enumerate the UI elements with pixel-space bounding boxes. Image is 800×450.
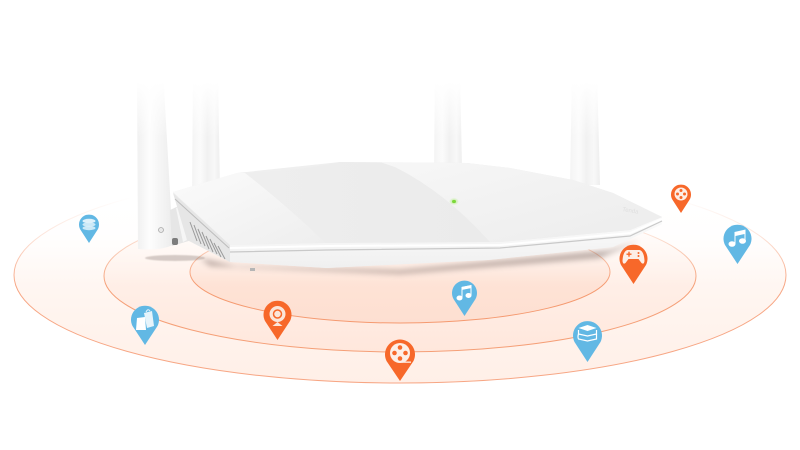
antenna shadow [145, 255, 205, 261]
coverage ring: outer [14, 167, 786, 383]
router seam line [230, 221, 662, 252]
pin: blue books [573, 321, 602, 362]
router logo: Tenda [622, 207, 639, 216]
router right facet [380, 162, 662, 242]
router shadow [200, 240, 640, 274]
router vented side [173, 193, 230, 262]
LED indicator [450, 198, 458, 204]
pin: orange game controller [620, 245, 648, 284]
router base fill [173, 162, 662, 268]
front left antenna [137, 70, 192, 250]
antenna top fade [120, 68, 620, 138]
router body [173, 162, 662, 271]
coverage ring: inner [190, 221, 610, 323]
router front shell [230, 217, 662, 268]
router top surface [245, 162, 662, 243]
coverage ring: middle [104, 200, 696, 352]
pin: blue music note large [724, 225, 752, 264]
router left wing [173, 173, 325, 245]
pin: blue stack [79, 215, 99, 243]
pin: orange film reel large [385, 339, 415, 381]
ring top fade [0, 160, 800, 285]
router feet [250, 268, 255, 271]
pin: orange film reel small [671, 185, 691, 213]
pin: orange webcam [264, 301, 292, 340]
pin: blue shopping bags [131, 306, 159, 345]
pin: blue music note center [452, 281, 477, 316]
back antennas [192, 70, 600, 195]
